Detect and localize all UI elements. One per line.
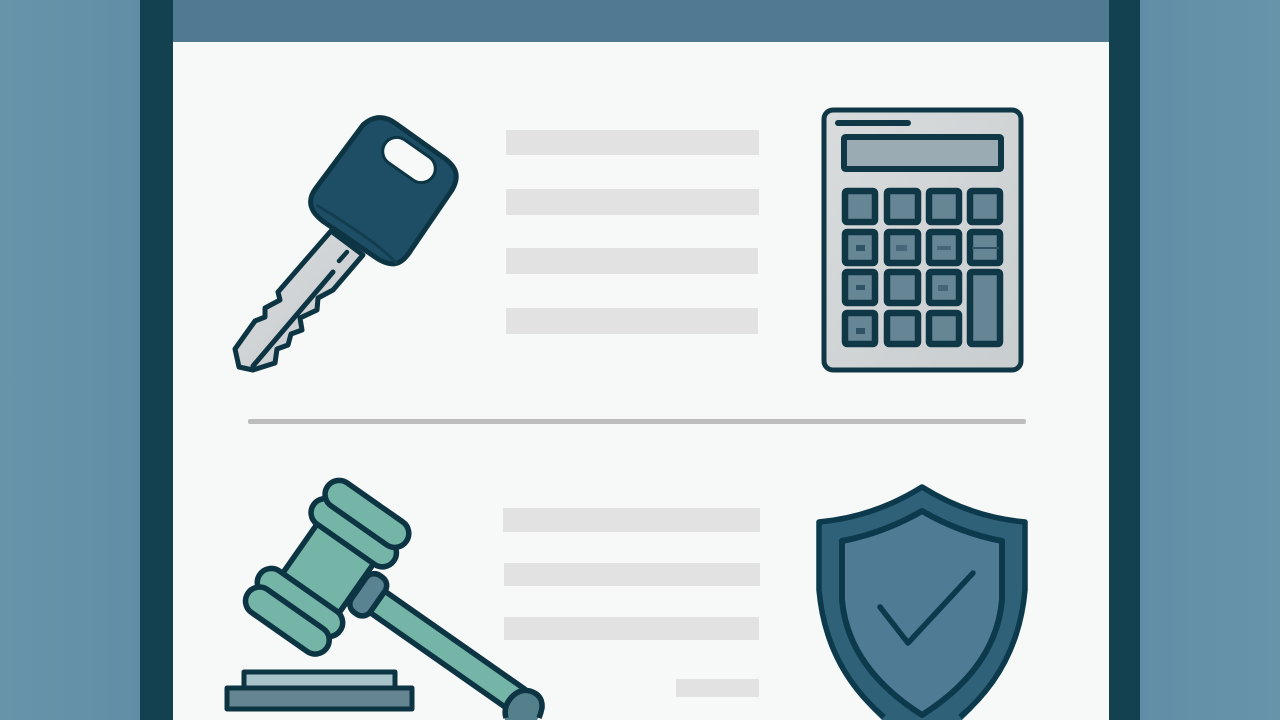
key groove	[253, 272, 333, 366]
gavel collar	[346, 570, 391, 620]
key ring hole	[377, 132, 441, 188]
shield outer fill	[819, 487, 1025, 720]
gavel head body	[280, 518, 378, 616]
calculator keys	[845, 191, 1000, 344]
gavel head rings	[306, 493, 402, 572]
header band	[173, 0, 1109, 42]
icon: car key	[235, 118, 456, 370]
text placeholder bars: bottom	[503, 508, 760, 697]
icon: shield with check	[819, 487, 1025, 720]
icon: gavel	[227, 472, 563, 720]
calculator key glyphs	[856, 245, 999, 334]
shield outer outline	[819, 487, 1025, 717]
text placeholder bars: top	[506, 130, 759, 334]
gavel block	[227, 672, 412, 709]
shield inner	[842, 511, 1002, 715]
calculator top bar	[835, 120, 911, 126]
key blade	[235, 231, 363, 370]
key head shade line	[318, 206, 396, 263]
shield check mark	[880, 573, 973, 643]
divider	[248, 419, 1026, 424]
key head	[311, 118, 456, 264]
key slot	[339, 252, 347, 261]
gavel hammer	[239, 472, 563, 720]
calculator screen	[844, 137, 1001, 169]
icon: calculator	[824, 110, 1021, 370]
document frame	[140, 0, 1140, 720]
gavel handle	[364, 587, 525, 711]
calculator body	[824, 110, 1021, 370]
gavel handle end cap	[505, 690, 542, 720]
